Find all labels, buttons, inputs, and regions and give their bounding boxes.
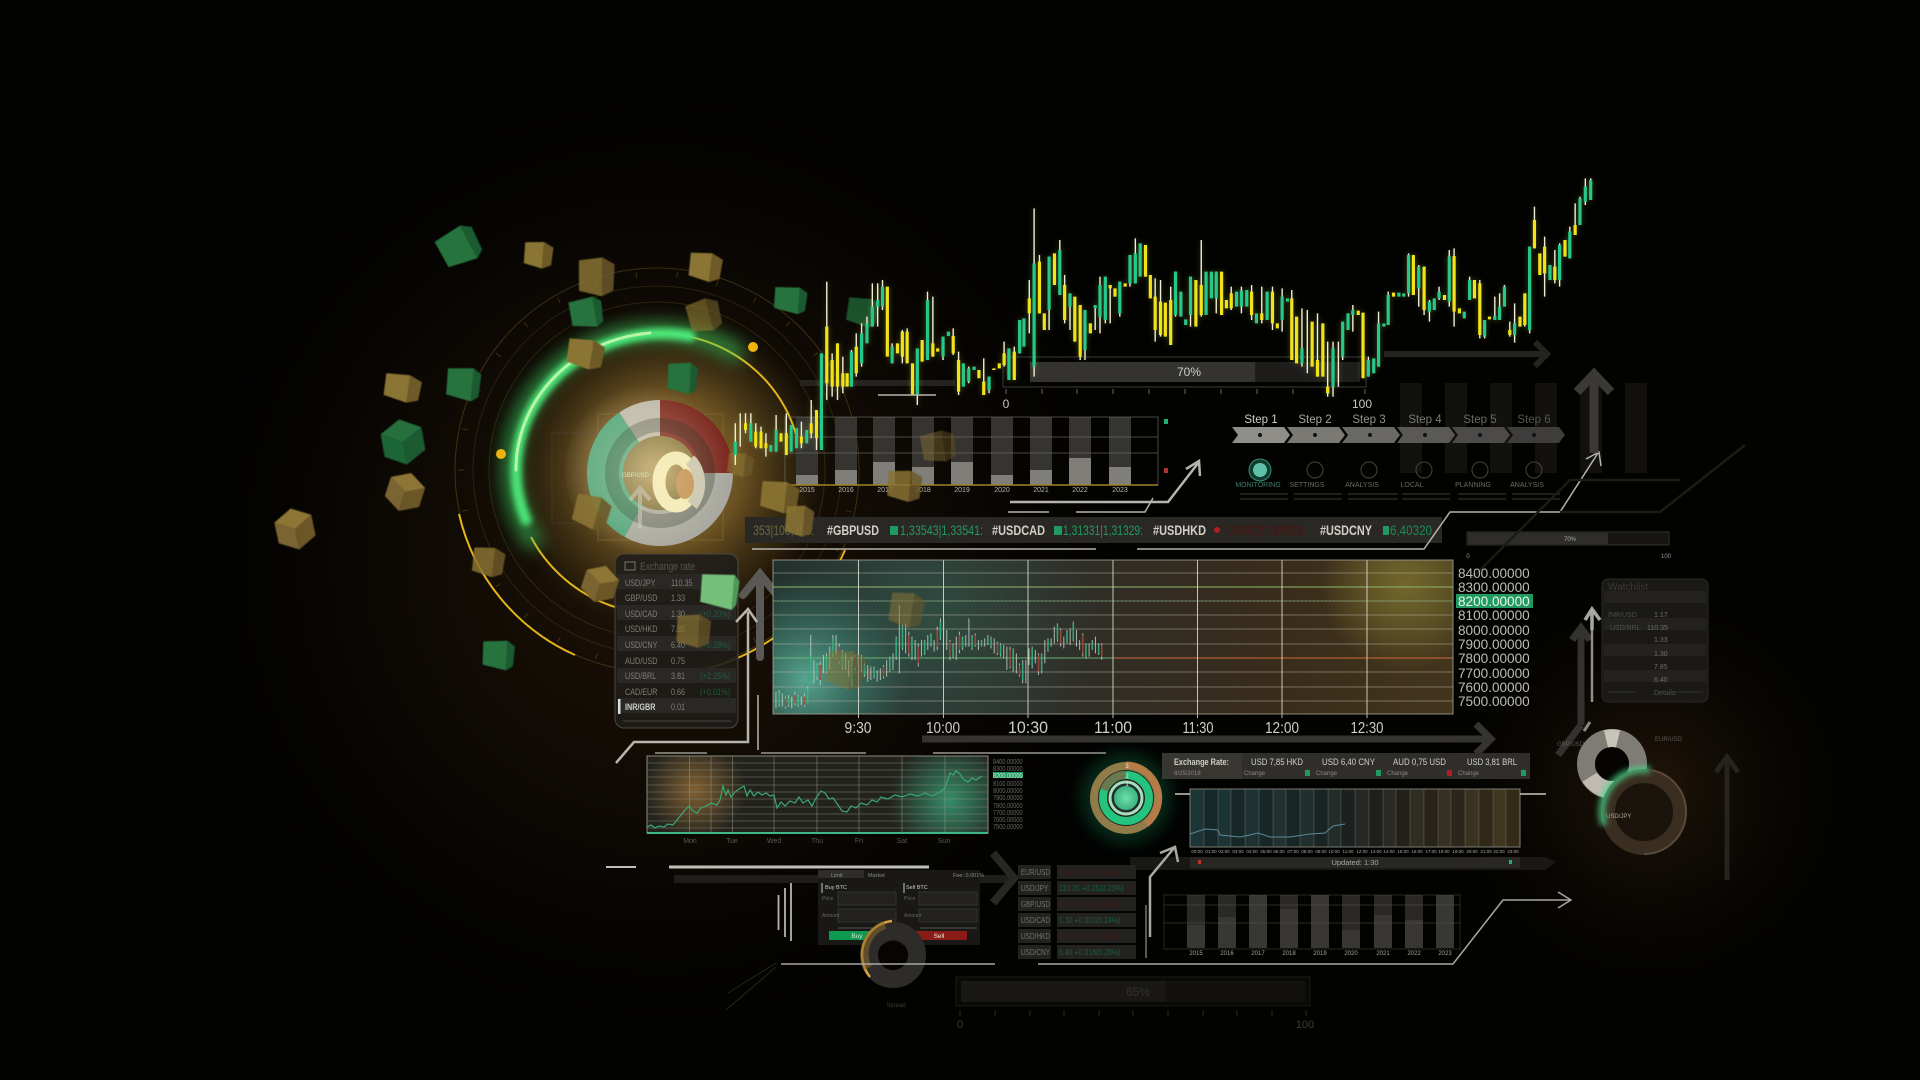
hourly chart: 06:00	[1273, 849, 1285, 854]
bar chart top: 2018	[915, 487, 931, 494]
process steps: Step 4	[1408, 414, 1442, 426]
progress bar 70 percent	[1003, 357, 1372, 411]
donut chart	[565, 385, 735, 555]
progress bar 65 percent: 0	[957, 1019, 963, 1031]
bar chart top: 2019	[954, 487, 970, 494]
main chart time labels: 11:30	[1182, 720, 1214, 737]
hourly chart: 14:00	[1383, 849, 1395, 854]
arrow up to hourly chart	[1150, 847, 1178, 937]
triple vertical bars	[778, 883, 791, 941]
progress bar 70 percent: 70%	[1177, 365, 1201, 379]
faint diagonal lines right	[1470, 445, 1745, 580]
exchange rate panel: 0.66	[671, 686, 685, 697]
big dark up arrow	[1577, 374, 1611, 453]
currency ticker: 7,85022|7,85031:	[1223, 523, 1306, 538]
process steps: Step 5	[1463, 414, 1497, 426]
trade order panel: Market	[868, 873, 885, 879]
candles main section	[821, 178, 1591, 450]
hourly chart: 00:00	[1191, 849, 1203, 854]
hourly chart: 15:00	[1397, 849, 1409, 854]
hourly chart: 12:00	[1356, 849, 1368, 854]
exchange rate strip: USD 3,81 BRL	[1467, 757, 1517, 768]
exchange rate panel: 6.40	[671, 639, 685, 650]
hourly chart: 03:00	[1232, 849, 1244, 854]
bar chart top: 2017	[877, 487, 893, 494]
weekly line chart: Sat	[897, 838, 907, 845]
main chart time labels: 12:30	[1350, 720, 1384, 737]
ring glow behind donut	[490, 295, 840, 645]
weekly chart price scale	[993, 758, 1023, 831]
main chart price scale: 7500.00000	[1458, 694, 1530, 709]
exchange rate strip: Change	[1458, 771, 1480, 777]
currency ticker	[745, 517, 1442, 543]
trade order panel: Buy BTC	[825, 885, 847, 891]
gauge	[1081, 753, 1171, 843]
gauge: 3	[1125, 764, 1129, 770]
exchange rate strip: Change	[1387, 771, 1409, 777]
right donut chart: GBP/USD	[1557, 742, 1585, 748]
exchange rate panel: 0.01	[671, 701, 685, 712]
currency pair list: USD/CNY	[1021, 947, 1050, 957]
dim up arrow inside donut	[630, 488, 650, 528]
bottom connector arrow	[726, 892, 1571, 1010]
bottom bar chart: 2022	[1407, 951, 1421, 957]
watchlist panel: USD/BRL	[1610, 625, 1640, 632]
progress bar 65 percent	[956, 977, 1314, 1031]
exchange rate panel: USD/HKD	[625, 623, 657, 634]
main chart price scale: 8200.00000	[1458, 594, 1530, 609]
bar chart top: 2016	[838, 487, 854, 494]
trade order panel: Price	[822, 896, 834, 902]
gray up arrow beside panel	[743, 574, 777, 657]
right ring chart	[1602, 770, 1686, 854]
exchange rate panel: 1.33	[671, 592, 685, 603]
currency ticker: 353|100,358:	[753, 523, 814, 538]
hourly chart: 18:00	[1438, 849, 1450, 854]
exchange rate panel: AUD/USD	[625, 655, 657, 666]
dim panel behind donut	[552, 414, 723, 540]
exchange rate strip: USD 7,85 HKD	[1251, 757, 1303, 768]
trade order panel: Sell BTC	[906, 885, 928, 891]
hourly chart: 13:00	[1370, 849, 1382, 854]
hourly chart: 11:00	[1343, 849, 1354, 854]
hourly chart status bar: Updated: 1:30	[1331, 858, 1379, 867]
main chart price scale: 8000.00000	[1458, 623, 1530, 638]
main chart price scale: 7900.00000	[1458, 637, 1530, 652]
bar chart top	[785, 417, 1168, 494]
trade order panel: Buy	[851, 933, 863, 940]
weekly chart price scale: 8100.00000	[993, 780, 1023, 788]
watchlist panel: Watchlist	[1608, 582, 1648, 593]
candles left section	[735, 400, 817, 465]
weekly line chart: Tue	[726, 838, 738, 845]
main chart price scale: 7700.00000	[1458, 666, 1530, 681]
currency ticker: #USDCNY	[1320, 523, 1372, 538]
watchlist panel	[1602, 579, 1708, 702]
currency ticker: #GBPUSD	[827, 523, 879, 538]
hourly chart: 05:00	[1260, 849, 1272, 854]
floating cubes	[272, 221, 957, 692]
right pointing gray arrow under chart	[922, 724, 1491, 754]
watchlist panel: 1.33	[1654, 637, 1668, 644]
mini progress bar	[1466, 532, 1672, 560]
bottom bar chart: 2015	[1189, 951, 1203, 957]
process steps: MONITORING	[1235, 482, 1281, 489]
exchange rate panel: 3.81	[671, 670, 685, 681]
weekly line chart	[647, 756, 988, 845]
watchlist panel: 110.35	[1647, 625, 1668, 632]
exchange rate panel: (+0.20%)	[700, 608, 730, 619]
dim up arrow far right	[1716, 757, 1738, 880]
hourly chart: 10:00	[1328, 849, 1340, 854]
weekly chart price scale: 7700.00000	[993, 809, 1023, 817]
currency pair list: USD/JPY	[1021, 883, 1048, 893]
process steps: Step 6	[1517, 414, 1551, 426]
exchange rate panel: 0.75	[671, 655, 685, 666]
weekly line chart: Sun	[938, 838, 950, 845]
currency ticker: #USDHKD	[1153, 523, 1206, 538]
hourly chart: 02:00	[1218, 849, 1230, 854]
main chart time labels: 12:00	[1265, 720, 1299, 737]
watchlist panel: 1.17	[1654, 612, 1668, 619]
currency pair list: 6.40 +0.018(0.28%)	[1059, 947, 1121, 957]
weekly chart price scale: 7500.00000	[993, 823, 1023, 831]
exchange rate panel: CAD/EUR	[625, 686, 657, 697]
exchange rate panel: 1.30	[671, 608, 685, 619]
hourly chart: 09:00	[1315, 849, 1327, 854]
currency pair list: 1.30 +0.003(0.24%)	[1059, 915, 1121, 925]
currency pair list: 110.35 +0.25(0.23%)	[1059, 883, 1124, 893]
main chart price scale: 8100.00000	[1458, 608, 1530, 623]
mini progress bar: 0	[1466, 554, 1470, 560]
watchlist panel: 1.30	[1654, 651, 1668, 658]
gray and white up arrows right	[1558, 609, 1600, 755]
hourly chart: 01:00	[1205, 849, 1217, 854]
main chart time labels: 9:30	[844, 720, 872, 737]
hourly chart status bar	[1130, 857, 1556, 870]
small white line under chart	[878, 394, 936, 396]
weekly line chart: Fri	[855, 838, 864, 845]
currency pair list: USD/CAD	[1021, 915, 1050, 925]
currency ticker: 6,40320	[1390, 523, 1432, 538]
main chart time labels: 10:00	[926, 720, 960, 737]
mini progress bar: 70%	[1564, 537, 1577, 543]
exchange rate panel: USD/CAD	[625, 608, 657, 619]
process steps: Step 1	[1244, 414, 1278, 426]
hourly chart: 22:00	[1493, 849, 1505, 854]
trade order panel: Fee: 0.001%	[953, 873, 984, 879]
right ring chart: USD/JPY	[1606, 814, 1631, 820]
bottom bar chart: 2019	[1313, 951, 1327, 957]
hourly chart: 04:00	[1246, 849, 1258, 854]
exchange rate panel: (+0.28%)	[700, 639, 730, 650]
currency pair list: GBP/USD	[1021, 899, 1050, 909]
weekly chart price scale: 7800.00000	[993, 802, 1023, 810]
currency pair list	[1018, 865, 1136, 959]
exchange rate panel: (+2.25%)	[700, 670, 730, 681]
bar chart top: 2022	[1072, 487, 1088, 494]
main candlestick chart	[735, 178, 1591, 465]
small donut with yellow arc	[862, 921, 917, 1009]
exchange rate panel: Exchange rate	[640, 561, 695, 573]
right donut chart: EUR/USD	[1655, 737, 1683, 743]
trade order panel: Amount	[822, 913, 840, 919]
currency ticker: 1,33543|1,33541:	[900, 523, 983, 538]
exchange rate panel: GBP/USD	[625, 592, 657, 603]
progress bar 65 percent: 65%	[1126, 985, 1150, 999]
hourly chart: 08:00	[1301, 849, 1313, 854]
exchange rate panel: 7.85	[671, 623, 685, 634]
main chart price scale	[1456, 566, 1533, 709]
currency ticker: 1,31331|1,31329:	[1063, 523, 1143, 538]
weekly chart price scale: 8300.00000	[993, 765, 1023, 773]
currency pair list: USD/HKD	[1021, 931, 1050, 941]
hourly chart: 21:00	[1480, 849, 1492, 854]
green glowing arc	[510, 331, 735, 540]
exchange rate panel: USD/JPY	[625, 577, 656, 588]
bar chart top: 2020	[994, 487, 1010, 494]
donut chart: GBP/USD	[622, 473, 650, 479]
main chart time labels: 11:00	[1094, 718, 1132, 737]
bottom bar chart: 2020	[1344, 951, 1358, 957]
trade order panel: Amount	[904, 913, 922, 919]
bottom bar chart	[1146, 895, 1460, 958]
exchange rate panel: (+0.01%)	[700, 686, 730, 697]
gauge: 1	[1125, 782, 1129, 788]
weekly chart price scale: 8400.00000	[993, 758, 1023, 766]
progress bar 70 percent: 0	[1003, 397, 1010, 411]
dim background bars top right	[1400, 383, 1647, 473]
currency ticker: #USDCAD	[992, 523, 1045, 538]
watchlist panel: 6.40	[1654, 677, 1668, 684]
trade order panel: Price	[904, 896, 916, 902]
hourly chart: 17:00	[1425, 849, 1437, 854]
bar chart top: 2021	[1033, 487, 1049, 494]
process steps: Step 2	[1298, 414, 1332, 426]
weekly chart price scale: 8200.00000	[993, 772, 1023, 780]
exchange rate strip: Change	[1244, 771, 1266, 777]
exchange rate panel	[615, 554, 738, 728]
exchange rate panel: USD/CNY	[625, 639, 658, 650]
weekly line chart: Wed	[767, 838, 781, 845]
main chart time labels	[844, 718, 1384, 737]
exchange rate panel: USD/BRL	[625, 670, 657, 681]
process steps: SETTINGS	[1289, 482, 1325, 489]
mini progress bar: 100	[1661, 554, 1672, 560]
bottom bar chart: 2021	[1376, 951, 1390, 957]
bar chart top: 2015	[799, 487, 815, 494]
trade order panel: Sell	[934, 933, 945, 940]
weekly chart price scale: 7600.00000	[993, 816, 1023, 824]
yellow dots on ring	[496, 342, 758, 588]
connector arrows top	[752, 452, 1601, 549]
exchange rate strip: AUD 0,75 USD	[1393, 757, 1446, 768]
hourly chart: 19:00	[1452, 849, 1464, 854]
process steps: PLANNING	[1455, 482, 1491, 489]
weekly line chart: Mon	[683, 838, 697, 845]
progress bar 65 percent: 100	[1296, 1019, 1314, 1031]
weekly chart price scale: 7900.00000	[993, 794, 1023, 802]
dark arrow bottom centre	[674, 853, 1014, 903]
hourly chart: 20:00	[1466, 849, 1478, 854]
exchange rate strip: Change	[1316, 771, 1338, 777]
bar chart top: 2023	[1112, 487, 1128, 494]
exchange rate strip: Exchange Rate:	[1174, 757, 1229, 768]
bottom bar chart: 2017	[1251, 951, 1265, 957]
dark arrows behind the candles	[800, 342, 1547, 383]
small donut with yellow arc: Spread	[886, 1003, 906, 1009]
exchange rate strip	[1162, 753, 1530, 779]
main chart price scale: 7800.00000	[1458, 651, 1530, 666]
horizontal white bars bottom left	[606, 866, 929, 868]
trade order panel: Limit	[831, 873, 843, 879]
weekly line chart: Thu	[811, 838, 823, 845]
connector arrow left	[616, 609, 1106, 763]
main chart price scale: 7600.00000	[1458, 680, 1530, 695]
trade order panel	[818, 870, 984, 945]
watchlist panel: INR/USD	[1608, 612, 1637, 619]
process steps: Step 3	[1352, 414, 1386, 426]
process steps: ANALYSIS	[1510, 482, 1544, 489]
exchange rate panel: INR/GBR	[625, 701, 655, 712]
hourly chart: 23:00	[1507, 849, 1519, 854]
currency pair list: 1.33 -0.001(-0.1%)	[1059, 899, 1117, 909]
progress bar 70 percent: 100	[1352, 397, 1372, 411]
main chart price scale: 8400.00000	[1458, 566, 1530, 581]
hourly chart: 16:00	[1411, 849, 1423, 854]
bottom bar chart: 2018	[1282, 951, 1296, 957]
hourly chart	[1175, 789, 1546, 854]
right donut chart	[1557, 737, 1683, 790]
process steps	[1232, 414, 1565, 499]
exchange rate panel: 110.35	[671, 577, 693, 588]
currency pair list: EUR/USD	[1021, 867, 1050, 877]
currency pair list: 1.17 -0.002(-0.2%)	[1059, 867, 1117, 877]
concentric gold rings	[455, 268, 859, 675]
main chart time labels: 10:30	[1008, 718, 1048, 737]
watchlist panel: 7.85	[1654, 664, 1668, 671]
bottom bar chart: 2016	[1220, 951, 1234, 957]
main chart price scale: 8300.00000	[1458, 580, 1530, 595]
watchlist panel: Details	[1654, 690, 1676, 697]
exchange rate strip: 8/25/2018	[1174, 771, 1201, 777]
hourly chart: 07:00	[1287, 849, 1299, 854]
gauge: 2	[1125, 774, 1129, 780]
bottom bar chart: 2023	[1438, 951, 1452, 957]
process steps: LOCAL	[1401, 482, 1424, 489]
weekly chart price scale: 8000.00000	[993, 787, 1023, 795]
process steps: ANALYSIS	[1345, 482, 1379, 489]
main chart candles	[776, 605, 1102, 708]
exchange rate strip: USD 6,40 CNY	[1322, 757, 1376, 768]
currency pair list: 7.85 -0.003(-0.1%)	[1059, 931, 1117, 941]
main chart	[773, 560, 1453, 718]
